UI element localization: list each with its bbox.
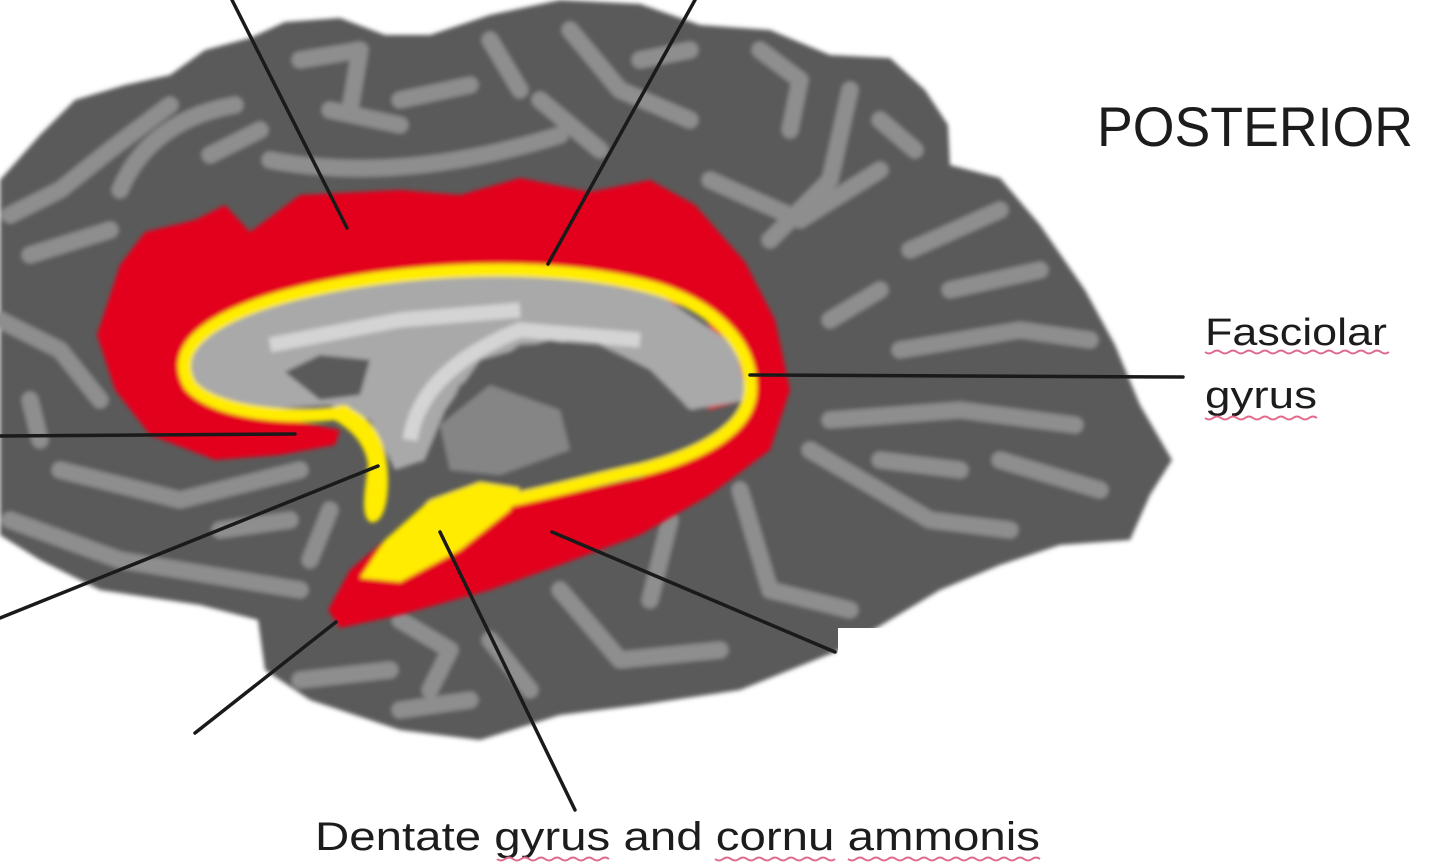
white patch over label area — [838, 628, 1058, 688]
label: fasciolar gyrus: gyrus — [1205, 375, 1317, 417]
yellow band: fasciolar and dentate — [184, 270, 750, 500]
label: fasciolar gyrus — [1205, 312, 1389, 420]
pointer lines — [0, 0, 1183, 810]
brain silhouette — [0, 0, 1172, 740]
thalamus and dark core — [285, 355, 370, 400]
label: fasciolar gyrus: Fasciolar — [1205, 312, 1387, 354]
limbic gyrus: red band — [97, 178, 790, 628]
label: dentate gyrus and cornu ammonis: Dentate gyrus and cornu ammonis — [315, 815, 1040, 859]
lighter gyri — [0, 30, 1100, 710]
label: posterior: POSTERIOR — [1097, 95, 1413, 158]
inner light-grey region — [185, 275, 748, 470]
